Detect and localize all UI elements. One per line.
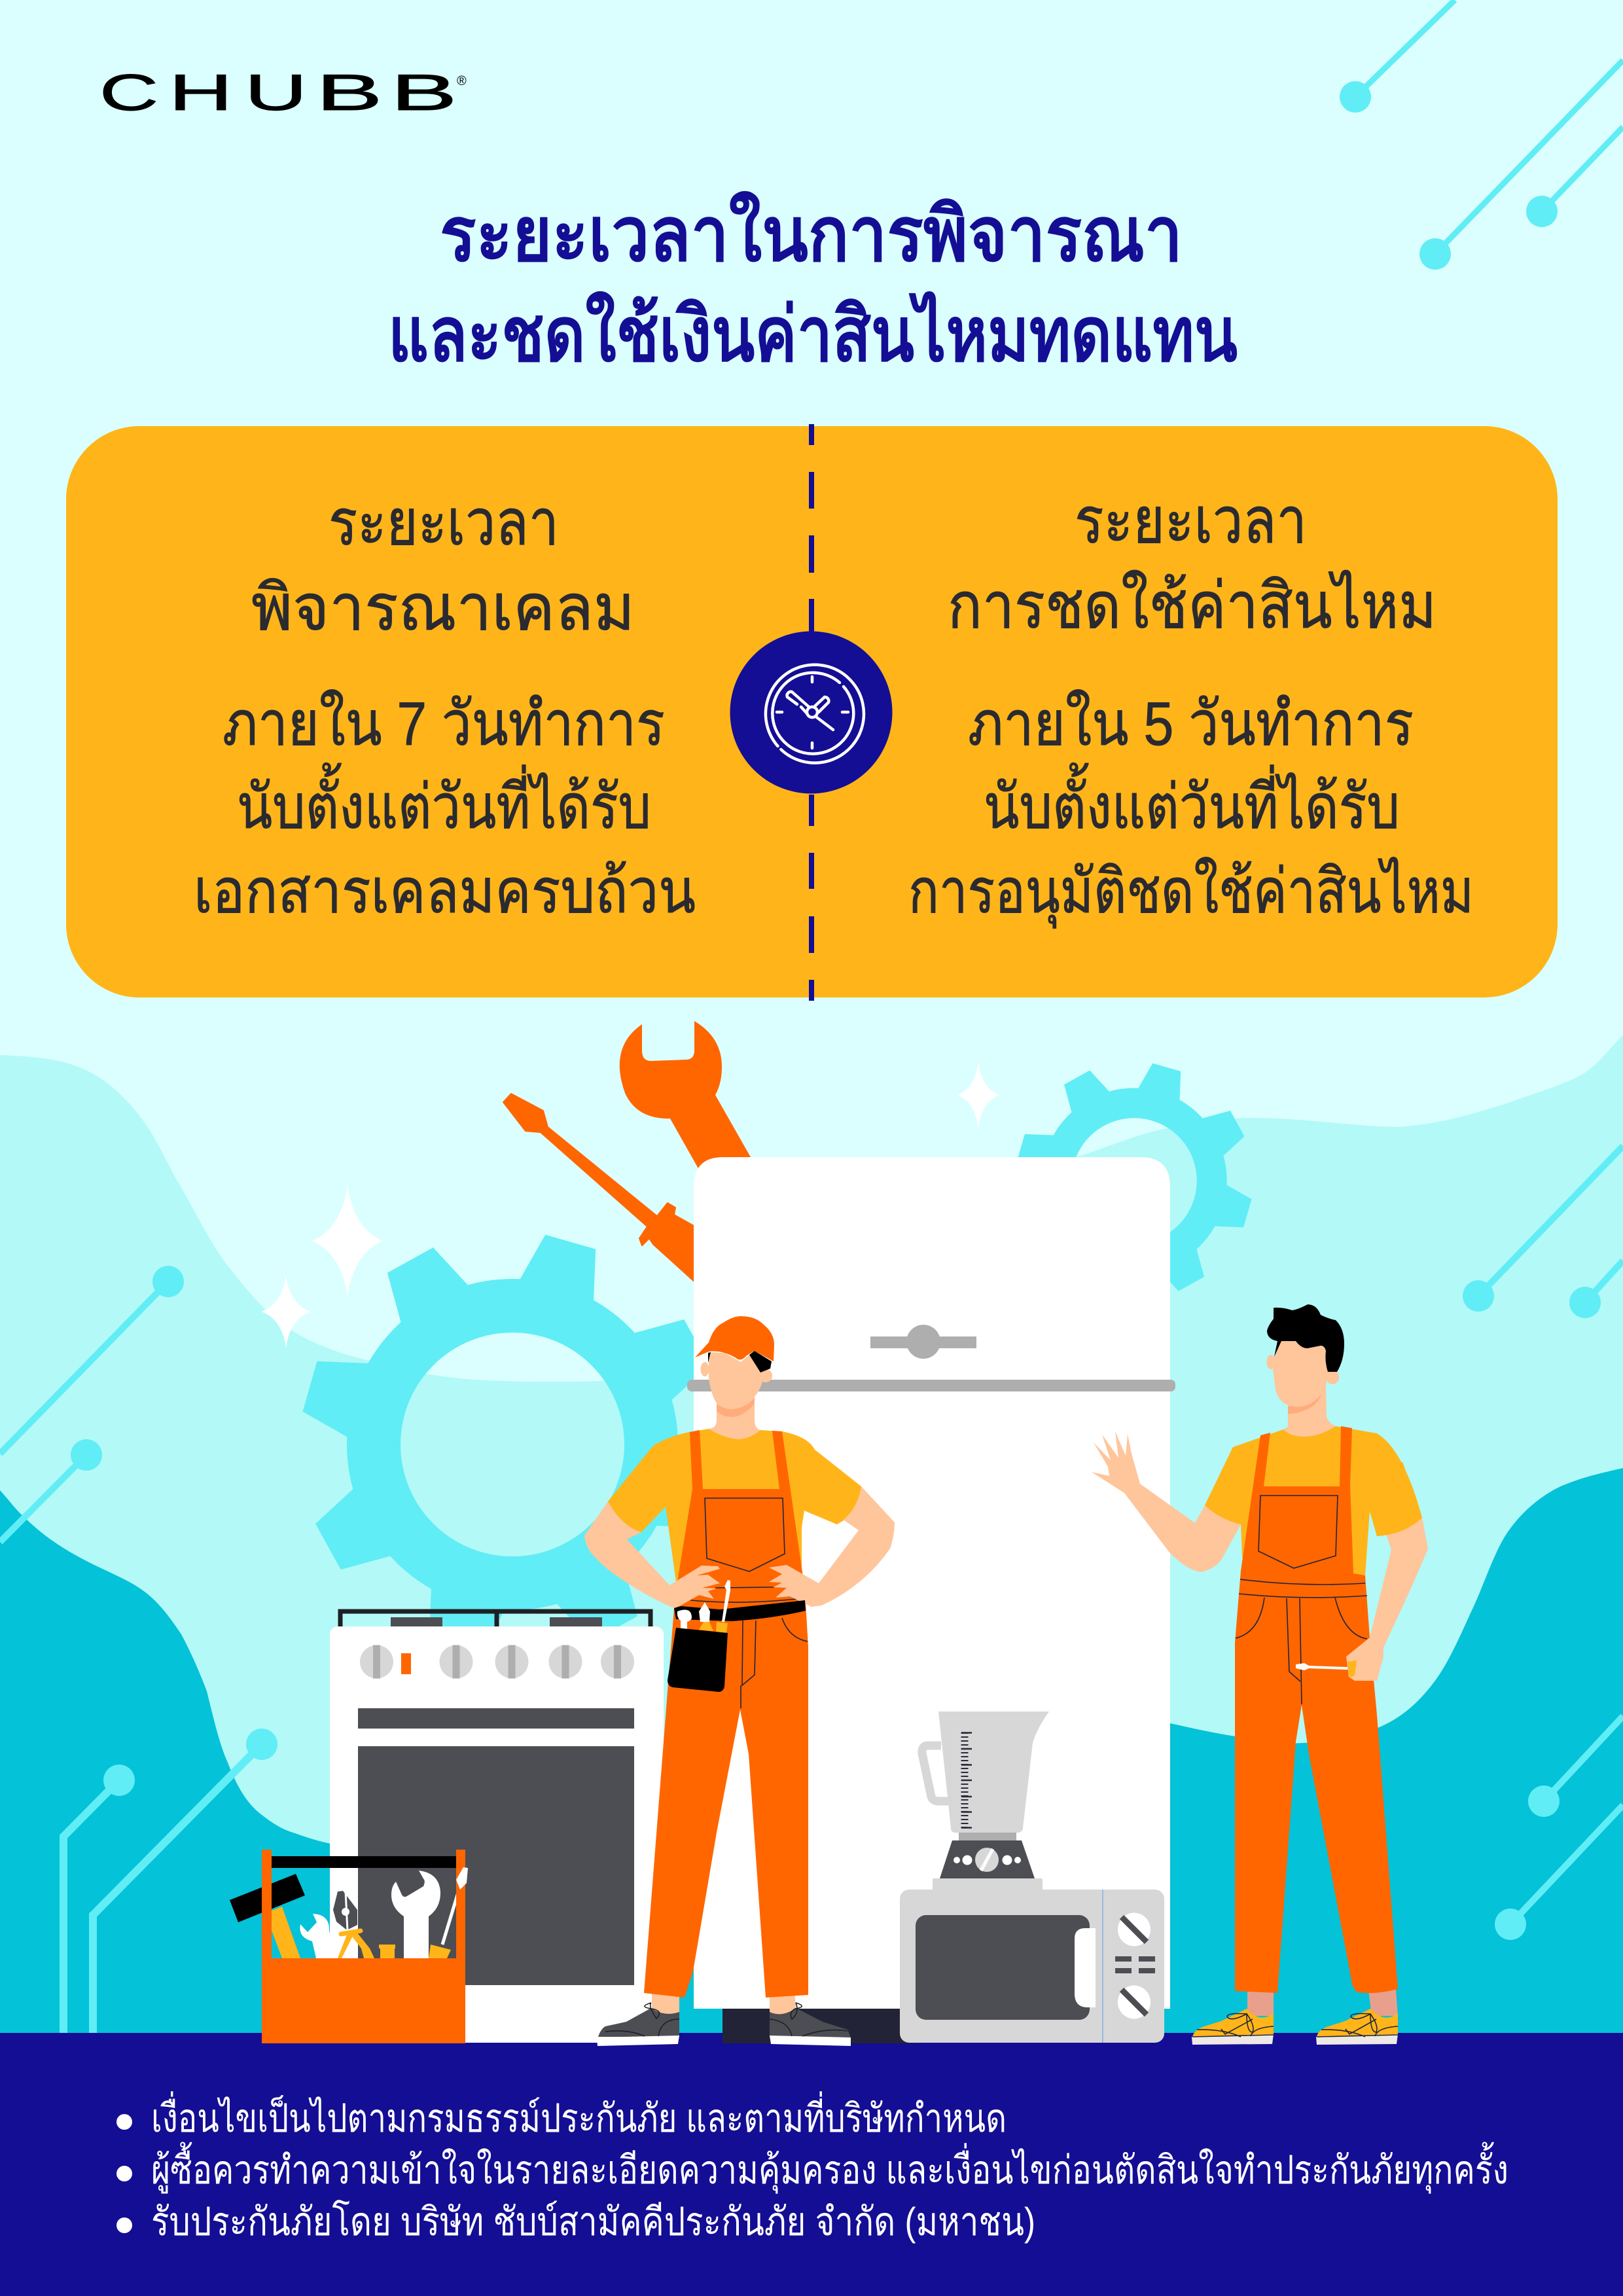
overall seams right [1236, 1496, 1367, 1704]
icon: floating wrench [620, 1021, 751, 1170]
plate [933, 1878, 1043, 1890]
pouch [668, 1628, 728, 1692]
overalls right worker [1235, 1426, 1398, 1993]
panel divider [1102, 1890, 1103, 2043]
right column text [908, 484, 1474, 929]
big wrench [391, 1871, 440, 1958]
circuit lines left [0, 1266, 184, 1542]
light cyan wave [0, 1035, 1623, 2094]
shins [652, 1990, 796, 2016]
panel background [66, 426, 1558, 997]
oven window [358, 1746, 634, 1985]
microwave door handle [1075, 1928, 1096, 2007]
right column text: นับตั้งแต่วันที่ได้รับ [984, 762, 1400, 841]
small wrench [300, 1914, 335, 1958]
knobs [360, 1645, 634, 1678]
logo: B [316, 64, 382, 121]
large gear [299, 1231, 726, 1658]
footer lines: รับประกันภัยโดย บริษัท ชับบ์สามัคคีประกันภัย จำกัด (มหาชน) [151, 2199, 1035, 2244]
shoes right worker [1192, 2009, 1398, 2045]
box [262, 1850, 465, 2043]
circuit lines right [1463, 1146, 1623, 1940]
blender [922, 1712, 1049, 1890]
icon: floating screwdriver [503, 1094, 695, 1282]
hammer [230, 1874, 305, 1958]
circuit lines bottom left [63, 1729, 277, 2033]
logo: C [99, 64, 158, 121]
dial and lights [954, 1848, 1021, 1872]
logo: B [391, 64, 457, 121]
pouch tools [676, 1580, 731, 1633]
sleeves right worker [1205, 1447, 1422, 1536]
panel: timing [66, 424, 1558, 1001]
handheld screwdriver [1296, 1660, 1357, 1677]
footer lines: เงื่อนไขเป็นไปตามกรมธรรม์ประกันภัย และตามที่บริษัทกำหนด [151, 2091, 1007, 2140]
small gear [1014, 1061, 1254, 1300]
overalls [644, 1430, 808, 1998]
logo [99, 63, 467, 121]
collar [959, 1833, 1016, 1841]
cap [695, 1316, 774, 1361]
right column text: การอนุมัติชดใช้ค่าสินไหม [908, 857, 1474, 929]
sleeves [608, 1446, 861, 1532]
box handle [272, 1856, 456, 1868]
shoes left worker [597, 2003, 851, 2046]
screwdriver blade [456, 1867, 468, 1890]
tool belt [674, 1600, 806, 1621]
neck shadow right [1288, 1393, 1322, 1414]
icon: clock [730, 631, 893, 793]
title [388, 191, 1238, 377]
motor base [940, 1840, 1035, 1878]
footer lines [151, 2091, 1508, 2244]
shins right worker [1247, 1990, 1398, 2016]
hair right worker [1267, 1304, 1344, 1372]
worker left [584, 1316, 895, 2046]
right column text: ระยะเวลา [1075, 484, 1307, 556]
jar handle [922, 1746, 949, 1801]
box screwdriver [429, 1888, 459, 1958]
raised arm and hand [1092, 1431, 1241, 1572]
microwave buttons [1115, 1956, 1155, 1973]
pliers [333, 1891, 374, 1958]
fridge seam [687, 1380, 1175, 1391]
microwave body [900, 1890, 1164, 2043]
sparkles [261, 1061, 999, 1348]
fridge handle [870, 1325, 976, 1359]
microwave window [916, 1915, 1090, 2020]
left column text [194, 486, 696, 925]
left column text: นับตั้งแต่วันที่ได้รับ [237, 762, 651, 841]
shirt [608, 1429, 861, 1582]
jar [938, 1712, 1049, 1833]
stove body [330, 1626, 664, 2043]
logo: H [169, 64, 232, 121]
neck and face [709, 1352, 762, 1444]
stove [330, 1611, 664, 2043]
title: และชดใช้เงินค่าสินไหมทดแทน [388, 291, 1238, 377]
footer notes [116, 2091, 1508, 2244]
ears [700, 1362, 772, 1382]
circuit lines top right [1340, 0, 1623, 270]
oven handle bar [358, 1708, 634, 1729]
logo: ® [457, 74, 467, 88]
fridge body [694, 1157, 1170, 2009]
fridge base [722, 2003, 919, 2043]
navy footer band [0, 2033, 1623, 2296]
title: ระยะเวลาในการพิจารณา [440, 191, 1183, 277]
microwave dials [1118, 1912, 1150, 2018]
lower arm and hand [1346, 1518, 1428, 1681]
microwave [900, 1890, 1164, 2043]
burner grid [340, 1611, 651, 1630]
logo: U [245, 63, 307, 121]
worker right [1092, 1304, 1428, 2045]
dark cyan wave [0, 1468, 1623, 2094]
bullet marks [116, 2114, 132, 2233]
left column text: เอกสารเคลมครบถ้วน [194, 857, 696, 925]
shirt right worker [1205, 1426, 1422, 1575]
left column text: ภายใน 7 วันทำการ [223, 689, 665, 758]
right column text: ภายใน 5 วันทำการ [968, 689, 1414, 758]
overall seams [690, 1498, 808, 1708]
yellow handle stub [379, 1945, 395, 1958]
measure ticks [961, 1732, 972, 1828]
right column text: การชดใช้ค่าสินไหม [948, 569, 1436, 641]
toolbox [230, 1850, 468, 2043]
ears and face [1267, 1341, 1339, 1444]
fridge [687, 1157, 1175, 2043]
hair [708, 1351, 772, 1372]
arms [584, 1486, 895, 1608]
neck shadow [717, 1398, 755, 1417]
left column text: ระยะเวลา [329, 486, 559, 558]
center dashed divider [809, 424, 814, 1001]
left column text: พิจารณาเคลม [251, 571, 635, 643]
